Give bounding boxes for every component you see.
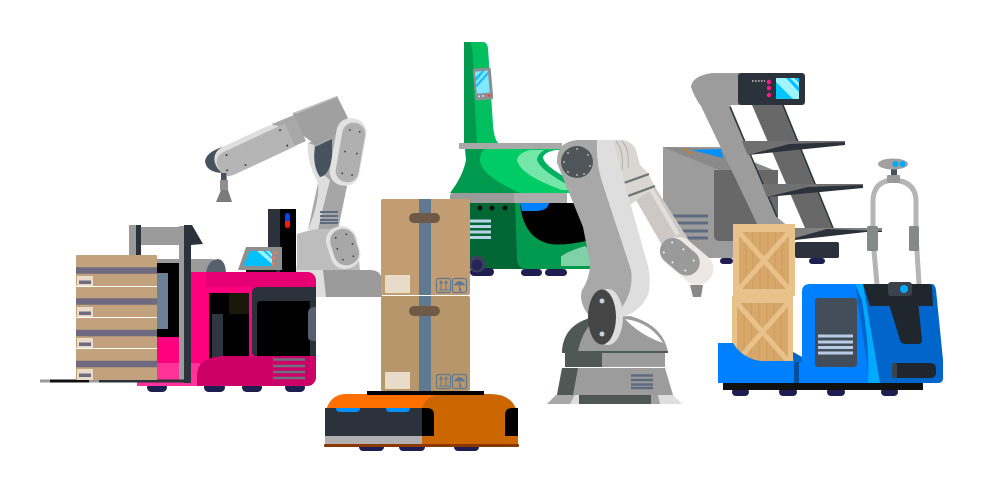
robot: green robot <box>450 42 592 276</box>
robot: orange base with cardboard boxes <box>324 199 519 451</box>
main link dark side <box>557 140 632 318</box>
base vents <box>631 376 653 388</box>
grey panel <box>815 298 857 367</box>
body <box>137 272 316 386</box>
handheld device <box>473 67 493 101</box>
arm tower <box>308 130 347 230</box>
shoulder hub <box>561 146 593 178</box>
rear leg <box>752 105 833 228</box>
sleeves <box>867 226 878 251</box>
wheels <box>147 383 167 392</box>
cabinet <box>663 147 795 258</box>
black tower <box>268 209 296 272</box>
cab window <box>209 293 249 360</box>
display panel <box>738 73 805 105</box>
arm shoulder <box>293 96 349 145</box>
tip <box>690 285 703 297</box>
U handle <box>873 180 919 284</box>
tablet <box>238 247 282 270</box>
forks <box>40 380 191 382</box>
arm forearm <box>210 119 295 180</box>
base foot <box>547 395 682 404</box>
rim <box>324 444 519 447</box>
base block <box>565 353 665 367</box>
robot arm: centre grey arm <box>547 140 720 404</box>
mast <box>179 226 184 380</box>
wheels <box>359 443 384 451</box>
robot: shelf delivery robot <box>663 73 882 264</box>
elbow rings <box>623 173 655 205</box>
shelf bar <box>459 143 562 149</box>
forearm upper joint <box>595 140 648 183</box>
cabinet vents <box>672 216 708 238</box>
stacked boxes <box>76 255 157 380</box>
rear hood <box>157 259 226 275</box>
base dome <box>562 316 668 352</box>
lower skirt <box>197 356 316 386</box>
dark front <box>325 408 422 436</box>
head <box>691 73 740 105</box>
black opening <box>520 203 590 244</box>
camera head <box>887 175 900 183</box>
shield <box>888 301 922 344</box>
wheels <box>720 258 733 264</box>
top camera <box>888 282 912 296</box>
robot arm: left white arm <box>205 96 382 297</box>
handle <box>892 363 936 378</box>
green wheels <box>470 268 494 276</box>
crates <box>732 224 795 361</box>
blue body <box>718 284 880 383</box>
arm vents <box>320 212 338 223</box>
indicator dots <box>478 206 482 210</box>
wheels and chassis <box>732 388 749 396</box>
orange body <box>325 394 518 444</box>
arm gripper <box>220 173 228 190</box>
forearm rod <box>633 187 692 252</box>
front leg <box>700 104 790 230</box>
torso <box>450 149 570 193</box>
elbow hub <box>593 289 623 345</box>
wrist plate <box>654 229 720 291</box>
arm base <box>323 270 382 297</box>
robot: pink forklift <box>40 209 316 392</box>
shelves <box>742 141 845 155</box>
dark panel <box>252 287 316 356</box>
lower body <box>470 203 592 269</box>
arm lower plate <box>322 222 364 273</box>
robot: blue robot with crates <box>718 158 943 396</box>
top plate <box>367 391 484 395</box>
backrest <box>464 42 498 143</box>
platform <box>450 193 514 203</box>
top box <box>381 199 470 295</box>
main link light side <box>590 140 650 317</box>
bottom box <box>381 296 470 391</box>
dark cap <box>863 284 933 306</box>
arm hub <box>297 229 360 270</box>
base middle <box>557 368 673 395</box>
pink vents <box>273 360 305 378</box>
green vents <box>470 221 491 238</box>
arm upper plate <box>327 116 369 188</box>
black panel <box>157 263 179 337</box>
blue lights <box>336 408 410 412</box>
arm end cap <box>205 145 236 173</box>
